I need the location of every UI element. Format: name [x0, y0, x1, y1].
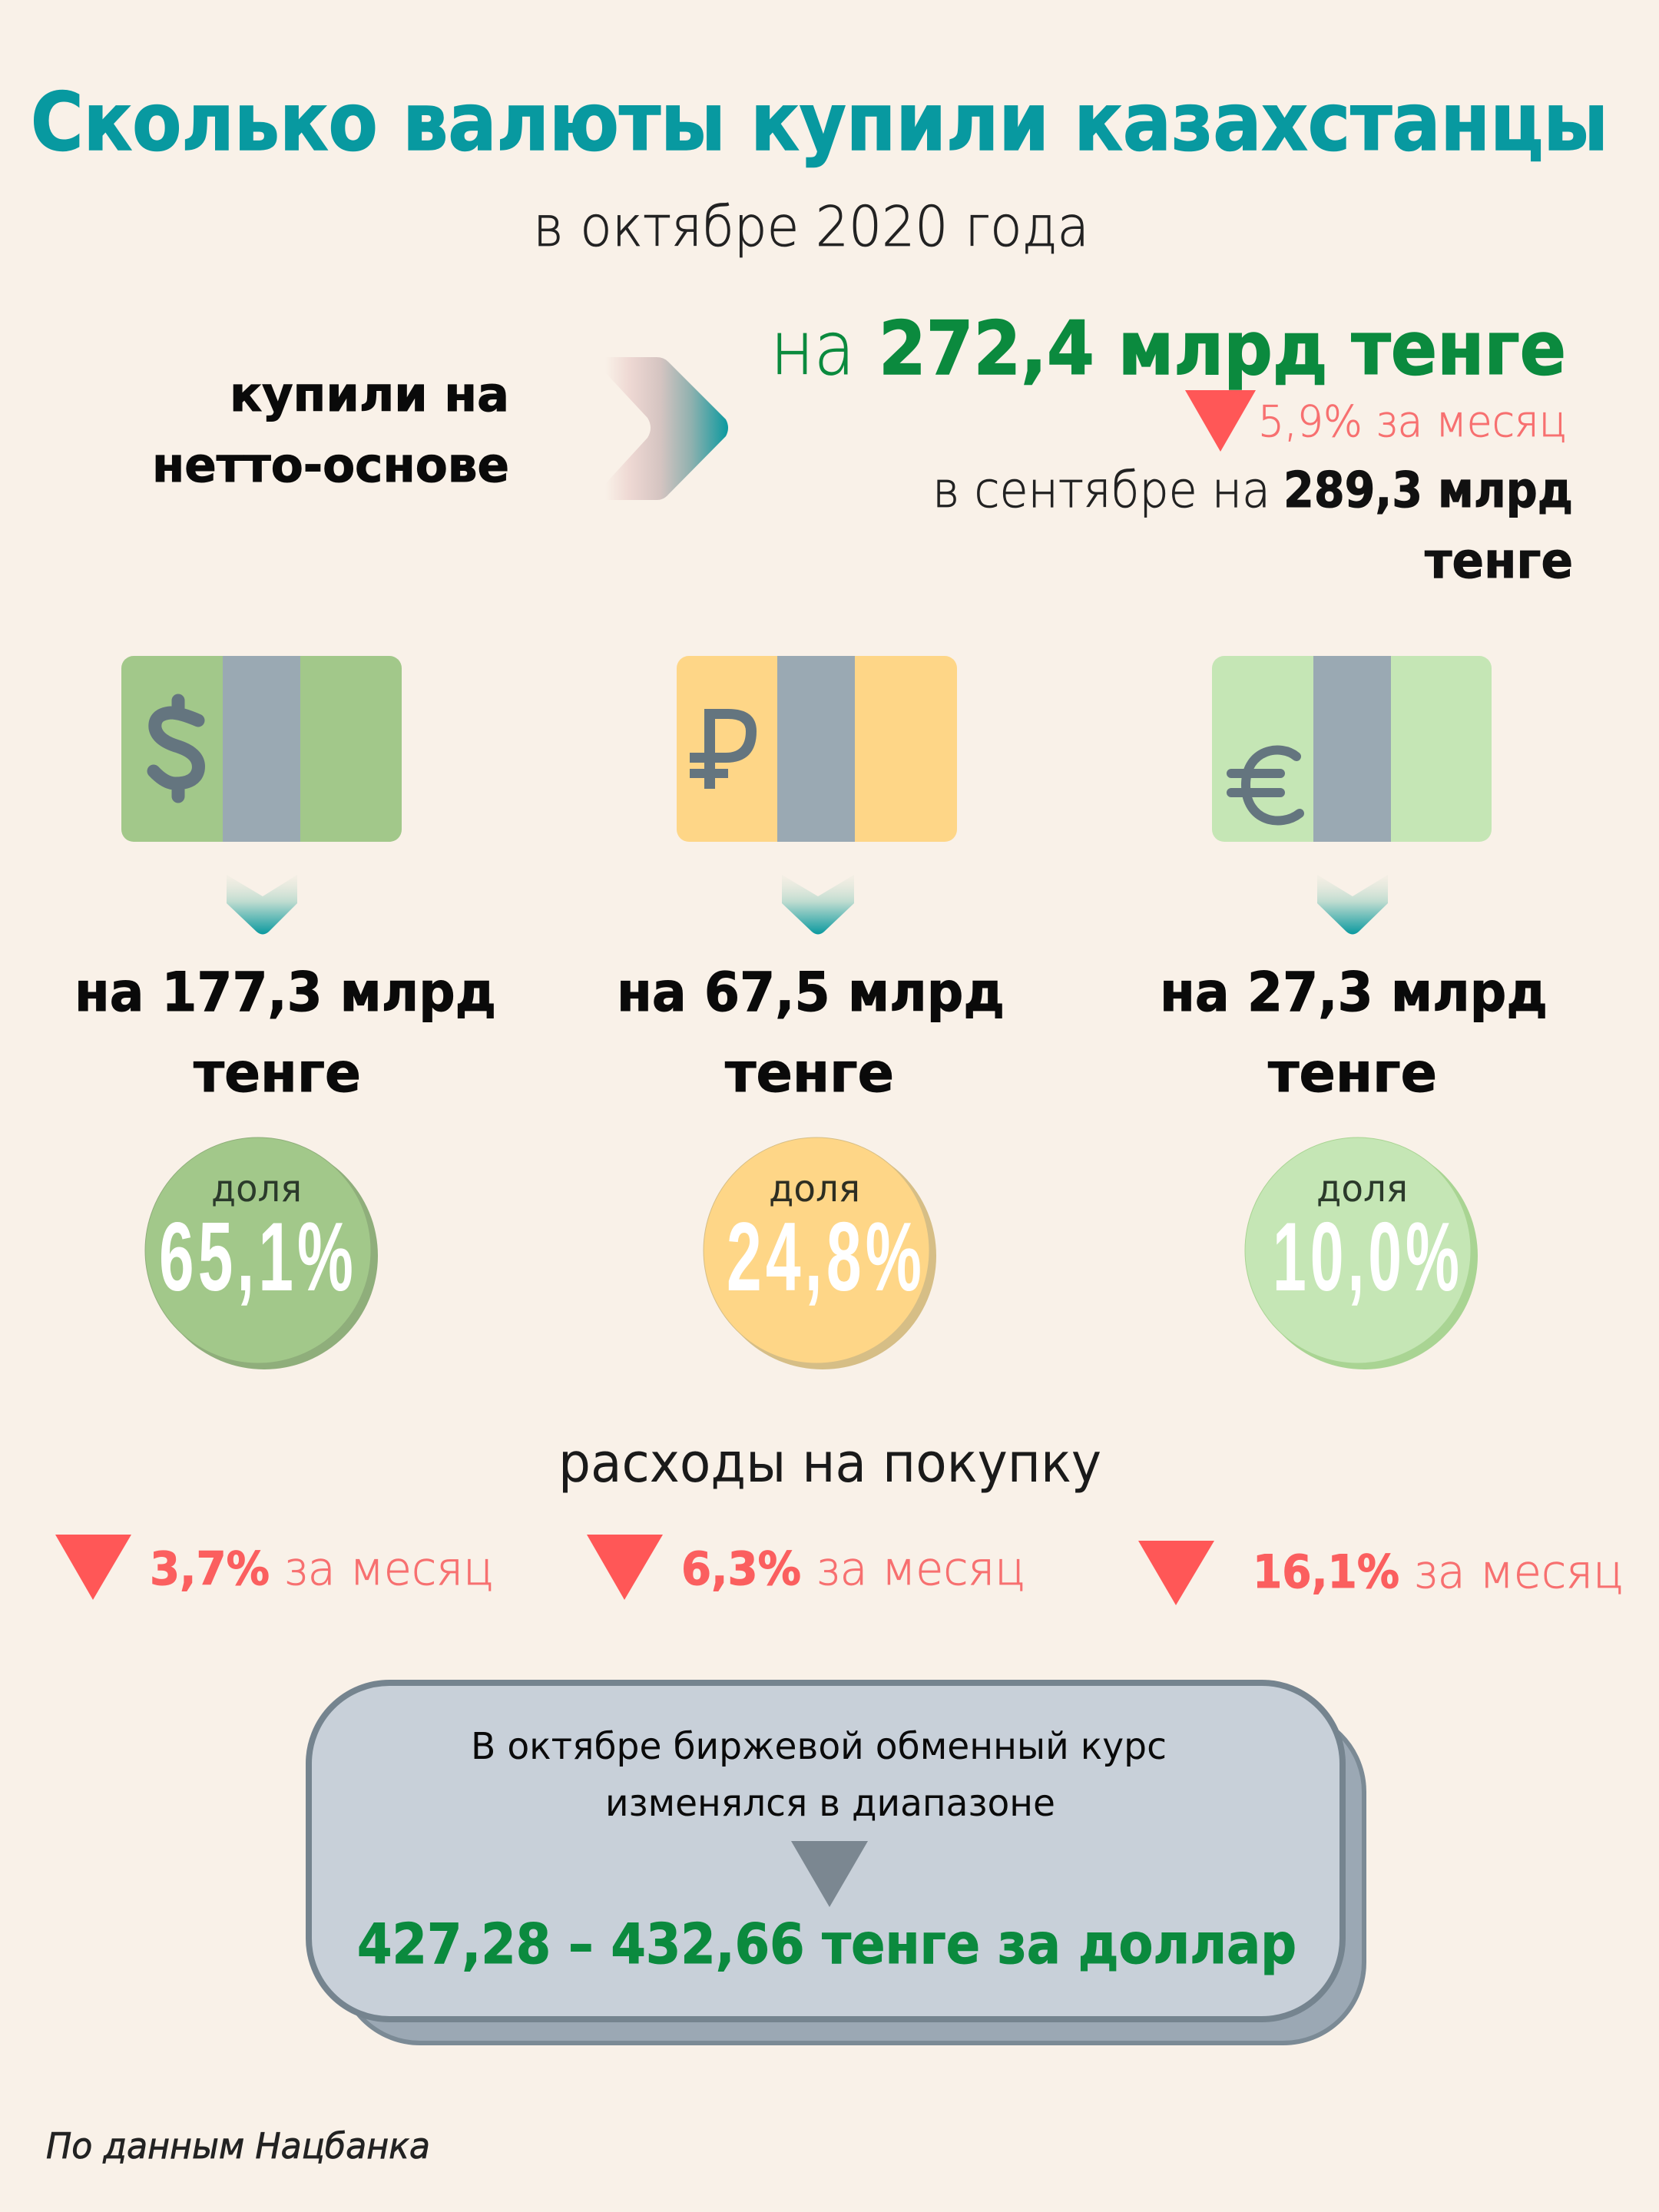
- circle: euro share: [1245, 1137, 1478, 1369]
- dollar amount: тенге: [194, 1041, 361, 1104]
- euro amount: тенге: [1268, 1041, 1437, 1104]
- rate description: В октябре биржевой обменный курс: [471, 1725, 1167, 1768]
- circle: ruble share: 24,8%: [727, 1202, 926, 1311]
- icon: euro banknote: [1212, 656, 1492, 842]
- circle: ruble share: доля: [769, 1167, 860, 1210]
- ruble amount: на 67,5 млрд: [617, 961, 1005, 1024]
- arrow: chevron right: [605, 357, 728, 500]
- arrow: down chevron euro: [1317, 875, 1388, 934]
- euro amount: [1160, 961, 1548, 1104]
- change: ruble: 6,3%: [681, 1542, 801, 1596]
- ruble amount: тенге: [725, 1041, 894, 1104]
- arrow: down chevron ruble: [782, 875, 854, 934]
- net purchase amount: на: [770, 306, 855, 392]
- september comparison: в сентябре на: [932, 462, 1270, 519]
- circle: dollar share: [145, 1137, 378, 1369]
- panel: exchange rate: [309, 1683, 1364, 2043]
- ruble amount: [617, 961, 1005, 1104]
- circle: dollar share: 65,1%: [159, 1202, 357, 1311]
- monthly change: 5,9% за месяц: [1258, 397, 1567, 447]
- circle: euro share: 10,0%: [1273, 1202, 1463, 1311]
- icon: red triangle euro: [1138, 1541, 1214, 1605]
- change: euro: за месяц: [1413, 1545, 1624, 1599]
- icon: red triangle dollar: [55, 1535, 131, 1600]
- icon: grey down triangle: [791, 1841, 868, 1907]
- dollar amount: [75, 961, 496, 1104]
- net purchase amount: 272,4 млрд тенге: [879, 306, 1566, 392]
- change: dollar: [150, 1542, 494, 1596]
- circle: dollar share: доля: [211, 1167, 302, 1210]
- subtitle: в октябре 2020 года: [533, 194, 1089, 259]
- icon: dollar banknote: [121, 656, 402, 842]
- net purchase label: [152, 366, 509, 493]
- change: ruble: [681, 1542, 1025, 1596]
- circle: euro share: доля: [1316, 1167, 1408, 1210]
- rate description: изменялся в диапазоне: [605, 1782, 1055, 1825]
- september comparison: тенге: [1425, 533, 1573, 590]
- change: euro: [1253, 1545, 1624, 1599]
- circle: ruble share: [704, 1137, 936, 1369]
- september comparison: [932, 462, 1573, 590]
- change: euro: 16,1%: [1253, 1545, 1399, 1599]
- change: ruble: за месяц: [816, 1542, 1025, 1596]
- icon: red triangle ruble: [587, 1535, 663, 1600]
- change: dollar: 3,7%: [150, 1542, 270, 1596]
- dollar amount: на 177,3 млрд: [75, 961, 496, 1024]
- euro amount: на 27,3 млрд: [1160, 961, 1548, 1024]
- september comparison: 289,3 млрд: [1283, 462, 1573, 519]
- icon: red down triangle: [1185, 390, 1256, 452]
- arrow: down chevron dollar: [227, 875, 297, 934]
- source note: По данным Нацбанка: [46, 2125, 430, 2167]
- heading: spending: расходы на покупку: [558, 1432, 1101, 1495]
- change: dollar: за месяц: [283, 1542, 494, 1596]
- icon: ruble banknote: [677, 656, 957, 842]
- net purchase label: купили на: [230, 366, 509, 422]
- rate range: 427,28 – 432,66 тенге за доллар: [357, 1912, 1296, 1976]
- rate description: [471, 1725, 1167, 1825]
- net purchase label: нетто-основе: [152, 437, 509, 493]
